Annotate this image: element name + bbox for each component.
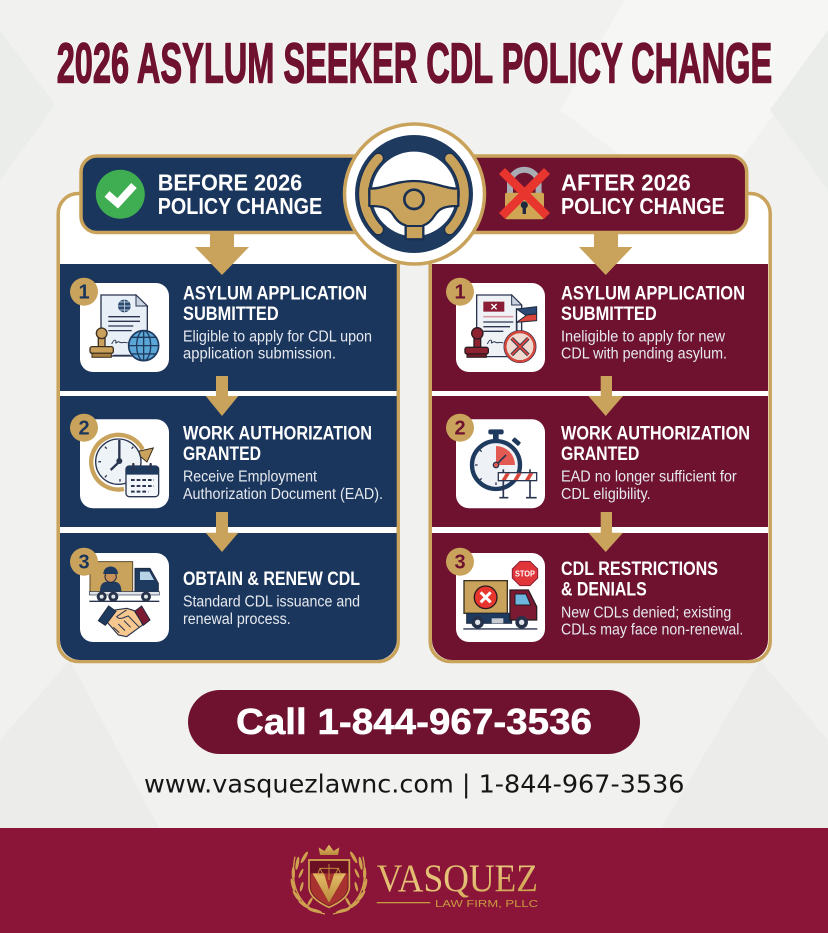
arrow: header to step 1 <box>579 233 632 275</box>
icon card: denied truck and stop sign: STOP <box>515 569 536 578</box>
icon: crossed-out padlock <box>502 170 547 219</box>
header: after 2026 <box>450 156 747 232</box>
step text: ASYLUM APPLICATION <box>183 284 367 304</box>
step text: application submission. <box>183 346 336 363</box>
step text: CDLs may face non-renewal. <box>561 621 743 638</box>
panel: after 2026 <box>430 156 770 662</box>
step 1: asylum application <box>70 278 372 372</box>
step text <box>561 284 745 363</box>
number badge 1 <box>446 278 474 306</box>
arrow: header to step 1 <box>195 233 249 275</box>
step text: GRANTED <box>183 444 261 465</box>
step text: New CDLs denied; existing <box>561 604 731 621</box>
step 2: work authorization insufficient <box>446 414 750 508</box>
step text: CDL with pending asylum. <box>561 346 727 363</box>
header text: AFTER 2026 <box>561 170 691 196</box>
step text: renewal process. <box>183 611 291 628</box>
step text: Standard CDL issuance and <box>183 594 360 611</box>
logo: Vasquez Law Firm <box>290 845 539 914</box>
step text: SUBMITTED <box>183 304 279 325</box>
logo wordmark: LAW FIRM, PLLC <box>435 898 539 910</box>
step text <box>561 559 743 638</box>
number badge 3: 3 <box>78 552 90 574</box>
arrow: step 2 to step 3 <box>206 512 238 552</box>
step 3 background <box>432 533 768 660</box>
step 3: obtain and renew CDL <box>70 548 360 642</box>
number badge 3 <box>70 548 98 576</box>
step text: Ineligible to apply for new <box>561 329 726 346</box>
icon card: truck and handshake <box>80 553 169 642</box>
icon card: stopwatch and barricade <box>456 419 545 508</box>
step text: Authorization Document (EAD). <box>183 486 383 503</box>
step 2 background <box>432 396 768 527</box>
call button: Call 1-844-967-3536 <box>236 701 592 742</box>
number badge 2 <box>70 414 98 442</box>
icon card: clock and calendar <box>80 419 169 508</box>
step text: OBTAIN & RENEW CDL <box>183 569 360 590</box>
step text <box>183 569 360 628</box>
arrow: step 1 to step 2 <box>588 376 623 416</box>
arrow: step 1 to step 2 <box>206 376 238 416</box>
number badge 2 <box>446 414 474 442</box>
arrow: step 2 to step 3 <box>588 512 623 552</box>
header text: BEFORE 2026 <box>158 170 302 196</box>
number badge 3 <box>446 548 474 576</box>
step text <box>561 423 750 503</box>
number badge 3: 3 <box>454 552 466 574</box>
step text: WORK AUTHORIZATION <box>183 423 372 444</box>
step 3 background <box>60 533 397 660</box>
step text <box>183 284 372 363</box>
icon: steering wheel emblem <box>344 124 484 264</box>
number badge 1: 1 <box>454 282 466 304</box>
header text: POLICY CHANGE <box>158 193 322 219</box>
header text <box>561 170 725 219</box>
step 1 background <box>60 264 397 391</box>
icon card: application and globe <box>80 283 169 372</box>
step 1: asylum application denied <box>446 278 745 372</box>
number badge 1: 1 <box>78 282 90 304</box>
step text: EAD no longer sufficient for <box>561 469 737 486</box>
header text: POLICY CHANGE <box>561 193 725 219</box>
number badge 2: 2 <box>454 418 466 440</box>
number badge 2: 2 <box>78 418 90 440</box>
step text: CDL RESTRICTIONS <box>561 559 718 580</box>
call button <box>188 690 640 754</box>
footer band <box>0 828 828 933</box>
step 3: CDL restrictions and denials <box>446 548 743 642</box>
step text: SUBMITTED <box>561 304 657 325</box>
logo emblem <box>290 845 368 914</box>
number badge 1 <box>70 278 98 306</box>
step 2: work authorization <box>70 414 383 508</box>
panel: before 2026 <box>58 156 398 662</box>
icon: green check <box>96 170 145 219</box>
step text: ASYLUM APPLICATION <box>561 284 745 304</box>
icon card: denied truck and stop sign <box>456 553 545 642</box>
step text: & DENIALS <box>561 580 647 601</box>
step 1 background <box>432 264 768 391</box>
step text: GRANTED <box>561 444 639 465</box>
step text: Receive Employment <box>183 469 318 486</box>
header text <box>158 170 322 219</box>
step text: Eligible to apply for CDL upon <box>183 329 372 346</box>
step text <box>183 423 383 503</box>
header: before 2026 <box>81 156 381 232</box>
step 2 background <box>60 396 397 527</box>
step text: CDL eligibility. <box>561 486 651 503</box>
step text: WORK AUTHORIZATION <box>561 423 750 444</box>
logo wordmark: VASQUEZ <box>377 857 538 900</box>
icon card: application with prohibition <box>456 283 545 372</box>
website and phone line: www.vasquezlawnc.com | 1-844-967-3536 <box>144 770 684 799</box>
